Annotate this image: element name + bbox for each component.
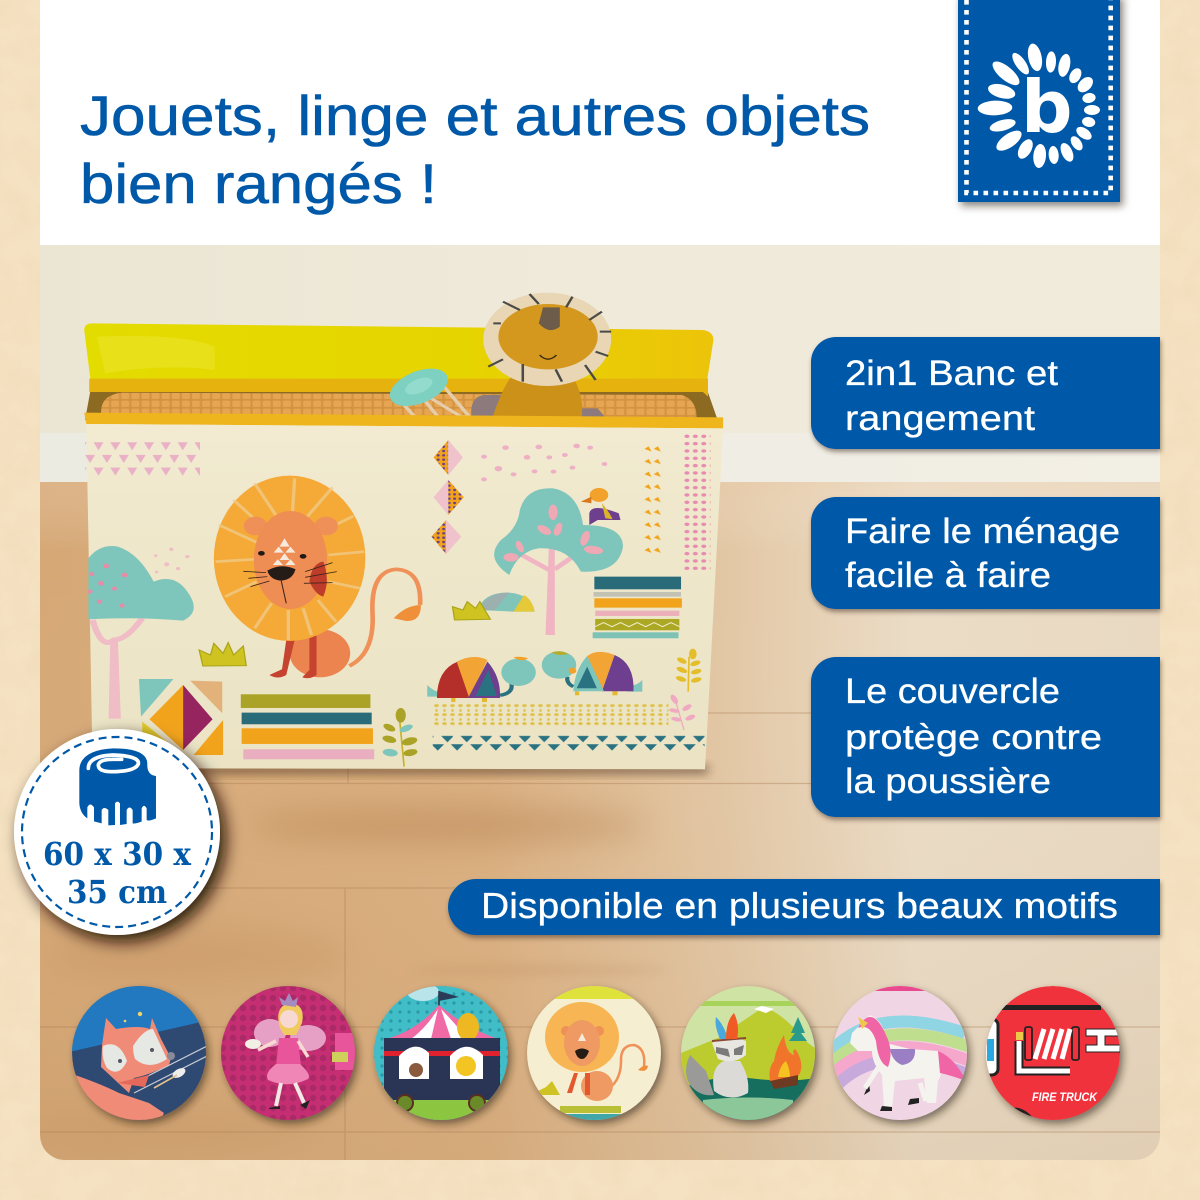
icon: measuring tape bbox=[79, 748, 156, 825]
title: bien rangés ! bbox=[80, 152, 437, 215]
yellow dot band bbox=[433, 703, 668, 726]
dimensions badge: 60 x 30 x bbox=[43, 835, 192, 873]
header panel bbox=[40, 0, 1160, 245]
motif: raccoon bbox=[681, 986, 815, 1120]
brand logo stamp: b bbox=[1021, 65, 1073, 149]
box rim bbox=[84, 413, 723, 428]
box front face bbox=[86, 424, 723, 769]
rattle toy bbox=[381, 361, 469, 417]
storage box bbox=[84, 293, 723, 769]
feature label: easy tidying bbox=[811, 497, 1160, 609]
pink confetti dots bbox=[481, 444, 607, 481]
motifs banner: Disponible en plusieurs beaux motifs bbox=[481, 885, 1118, 926]
feature label: dust protection: Le couvercle bbox=[845, 672, 1060, 711]
brand logo stamp bbox=[958, 0, 1120, 202]
right leaves bbox=[668, 649, 702, 730]
folded blanket bbox=[101, 393, 697, 417]
motif: fire truck bbox=[981, 986, 1120, 1123]
left tree bbox=[88, 546, 194, 719]
turtles bbox=[427, 651, 642, 702]
colored stripes right bbox=[593, 577, 682, 638]
title: Jouets, linge et autres objets bbox=[80, 84, 870, 147]
feature label: dust protection: la poussière bbox=[845, 762, 1051, 801]
motif: fairy princess bbox=[221, 986, 355, 1120]
teal triangle band bbox=[433, 735, 705, 752]
grass tuft bbox=[199, 643, 246, 666]
bottom plant bbox=[381, 708, 419, 767]
stones bbox=[471, 395, 605, 417]
motif: fire truck: FIRE TRUCK bbox=[1032, 1092, 1098, 1104]
motif: fox bbox=[69, 983, 209, 1123]
feature label: easy tidying: facile à faire bbox=[845, 556, 1051, 595]
feature label: easy tidying: Faire le ménage bbox=[845, 512, 1120, 551]
hill and grass bbox=[452, 593, 535, 620]
bottom geometric tile bbox=[139, 679, 223, 755]
diamond pattern bbox=[431, 440, 464, 554]
title bbox=[80, 84, 870, 215]
wooden floor bbox=[30, 482, 1160, 1162]
feature label: dust protection bbox=[811, 657, 1160, 817]
dimensions badge bbox=[14, 729, 220, 935]
motif: lion bbox=[527, 986, 661, 1122]
plush lion bbox=[483, 293, 611, 417]
box floor shadow bbox=[96, 766, 708, 773]
pink triangle pattern bbox=[85, 442, 200, 477]
product photo panel bbox=[30, 245, 1160, 1162]
pink dot column bbox=[683, 433, 711, 570]
motif: unicorn bbox=[825, 986, 970, 1120]
dimensions badge: 35 cm bbox=[67, 873, 167, 911]
motif: circus train bbox=[374, 983, 511, 1120]
right tree with bird bbox=[494, 488, 623, 635]
feature label: 2in1 bench and storage: 2in1 Banc et bbox=[845, 354, 1058, 393]
feature label: 2in1 bench and storage bbox=[811, 337, 1160, 449]
big lion illustration bbox=[214, 476, 421, 678]
orange triangles column bbox=[642, 446, 662, 560]
motifs banner bbox=[448, 879, 1160, 935]
feature label: dust protection: protège contre bbox=[845, 718, 1102, 757]
bottom stripes bbox=[241, 694, 374, 759]
baseboard bbox=[40, 433, 1160, 482]
box interior bbox=[85, 390, 718, 420]
feature label: 2in1 bench and storage: rangement bbox=[845, 399, 1035, 438]
padded lid bbox=[84, 323, 713, 397]
wall bbox=[40, 245, 1160, 433]
